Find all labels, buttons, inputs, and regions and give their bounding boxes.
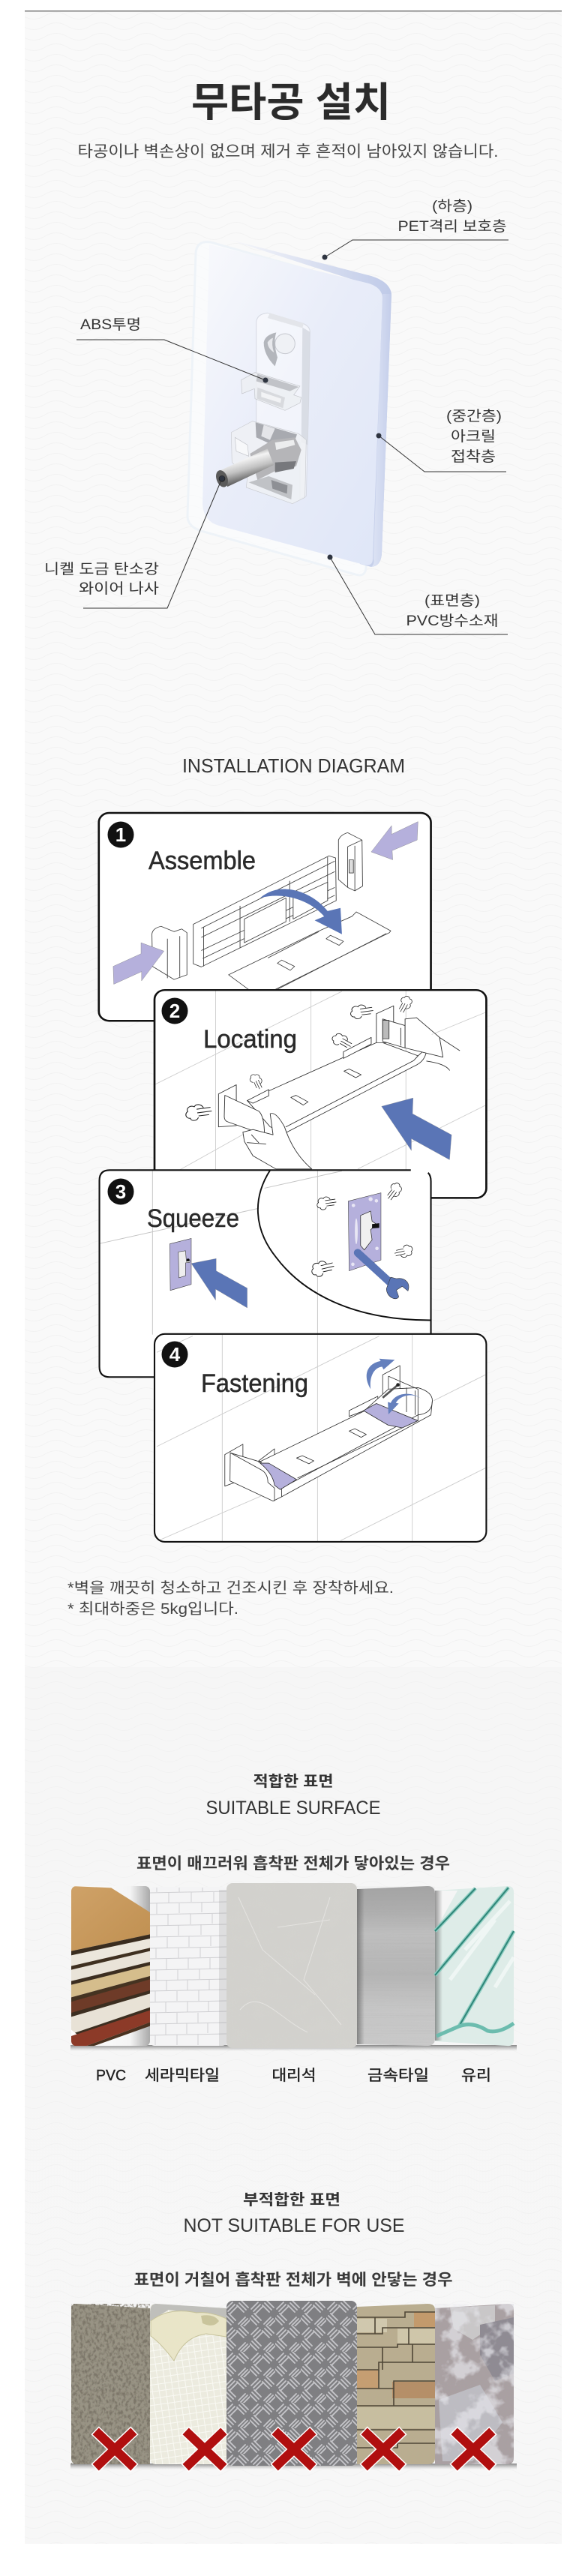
card: ceramic tile [150, 1887, 226, 2046]
suitable description: 표면이 매끄러워 흡착판 전체가 닿아있는 경우 [136, 1855, 450, 1873]
callout label: surface layer: (표면층) [424, 592, 480, 609]
card: tread plate [226, 2301, 357, 2466]
bracket hole [275, 334, 295, 354]
callout line: ABS [76, 340, 268, 382]
card: PVC [71, 1886, 150, 2046]
right wall mount [382, 1365, 400, 1395]
callout label: PVC: PVC방수소재 [406, 613, 498, 629]
x mark 1 [99, 2434, 130, 2464]
left hand [243, 1114, 312, 1169]
suitable heading English: SUITABLE SURFACE [206, 1798, 381, 1819]
upper clip [242, 373, 302, 410]
arrow: blue [191, 1258, 248, 1308]
end cap right [338, 832, 362, 891]
product diagram: layered adhesive plate [188, 238, 392, 575]
callout line: PET [322, 240, 508, 259]
suitable surface cards [70, 1883, 517, 2051]
bracket back [256, 313, 310, 499]
step 4 label: Fastening [201, 1369, 308, 1398]
shadow [70, 2045, 517, 2051]
small plate [170, 1238, 191, 1291]
step 4 panel: fastening [154, 1334, 486, 1542]
callout label: acrylic: 아크릴 [451, 428, 496, 445]
frame [194, 856, 336, 967]
x mark 4 [368, 2434, 399, 2464]
card: marble [226, 1883, 357, 2048]
x mark 2 [189, 2434, 220, 2464]
screw threaded part [250, 437, 302, 480]
red x marks [99, 2434, 489, 2464]
shelf tray [248, 1042, 427, 1132]
step 4 number badge: 4 [170, 1343, 181, 1366]
arrow: purple right [371, 822, 418, 859]
suitable heading Korean: 적합한 표면 [254, 1773, 333, 1790]
callout line: surface layer [327, 555, 508, 634]
mini wrench [382, 1385, 398, 1398]
right mount [376, 1006, 394, 1042]
card: glass [435, 1886, 514, 2046]
step 1 label: Assemble [148, 847, 256, 875]
arrow: blue curved [260, 889, 342, 934]
step 3 panel: squeeze [100, 1167, 431, 1377]
arrow: blue curved bottom [388, 1394, 421, 1414]
shadow [70, 2464, 517, 2470]
shelf body [230, 1387, 432, 1501]
big plate [348, 1193, 381, 1271]
card: stacked stone [357, 2304, 435, 2464]
step 4 number badge [162, 1341, 188, 1368]
installation diagram heading: INSTALLATION DIAGRAM [182, 754, 405, 777]
plate back outline [188, 242, 376, 575]
callout line: middle layer [376, 433, 506, 472]
subtitle: 타공이나 벽손상이 없으며 제거 후 흔적이 남아있지 않습니다. [78, 143, 498, 160]
magnified circle [258, 1170, 431, 1320]
card: peeling surface [435, 2304, 514, 2464]
callout label: ABS: ABS투명 [80, 316, 141, 333]
callout label: nickel: 니켈 도금 탄소강 [44, 561, 159, 577]
step 2 label: Locating [203, 1025, 297, 1054]
callout label: PET: PET격리 보호층 [398, 218, 507, 235]
surface label: ceramic tile: 세라믹타일 [145, 2067, 220, 2084]
x mark 5 [458, 2434, 489, 2464]
surface label: PVC: PVC [96, 2068, 126, 2084]
screw body [219, 448, 274, 487]
x mark 3 [278, 2434, 310, 2464]
title: 무타공 설치 [191, 80, 391, 125]
not suitable heading English: NOT SUITABLE FOR USE [183, 2215, 405, 2236]
step 1 number badge: 1 [116, 823, 126, 846]
card: metal tile [357, 1886, 435, 2046]
card: rough concrete [71, 2304, 150, 2464]
surface label: marble: 대리석 [272, 2067, 316, 2084]
not suitable description: 표면이 거칠어 흡착판 전체가 벽에 안닿는 경우 [134, 2272, 453, 2289]
callout label: middle layer: (중간층) [446, 408, 502, 424]
plate side band [225, 238, 392, 567]
wrench [358, 1253, 392, 1285]
hardware: bracket and screw [214, 313, 310, 504]
not suitable heading Korean: 부적합한 표면 [243, 2191, 340, 2209]
step 2 panel: locating [154, 990, 486, 1198]
callout label: adhesive layer: 접착층 [451, 448, 496, 465]
plate front face [202, 244, 382, 565]
notch in top border [411, 1167, 429, 1172]
end cap left [152, 926, 187, 979]
not suitable surface cards [70, 2301, 517, 2470]
surface label: metal tile: 금속타일 [368, 2067, 429, 2084]
step 2 number badge [162, 997, 188, 1024]
step 2 number badge: 2 [170, 1000, 180, 1022]
step 3 label: Squeeze [147, 1204, 239, 1233]
step 1 number badge [108, 822, 134, 847]
step 3 number badge [108, 1179, 134, 1204]
arrow: blue [382, 1098, 452, 1160]
arrow: purple left [113, 943, 164, 984]
lower block [231, 421, 306, 504]
step 1 panel: assemble [99, 813, 431, 1021]
callout line: screw [83, 475, 225, 608]
note 2: * 최대하중은 5kg입니다. [68, 1600, 238, 1618]
card: wallpaper roll [150, 2304, 226, 2464]
surface label: glass: 유리 [461, 2067, 491, 2084]
arrow: blue curved top [367, 1359, 394, 1389]
left mount [218, 1085, 236, 1127]
callout label: lower layer: (하층) [432, 198, 472, 214]
callout label: wire screw: 와이어 나사 [79, 580, 159, 597]
purple pads [260, 1463, 296, 1489]
right hand [405, 1018, 460, 1070]
note 1: *벽을 깨끗히 청소하고 건조시킨 후 장착하세요. [68, 1579, 394, 1597]
left wall mount [225, 1444, 243, 1486]
step 3 number badge: 3 [116, 1180, 126, 1203]
plate [229, 912, 391, 991]
